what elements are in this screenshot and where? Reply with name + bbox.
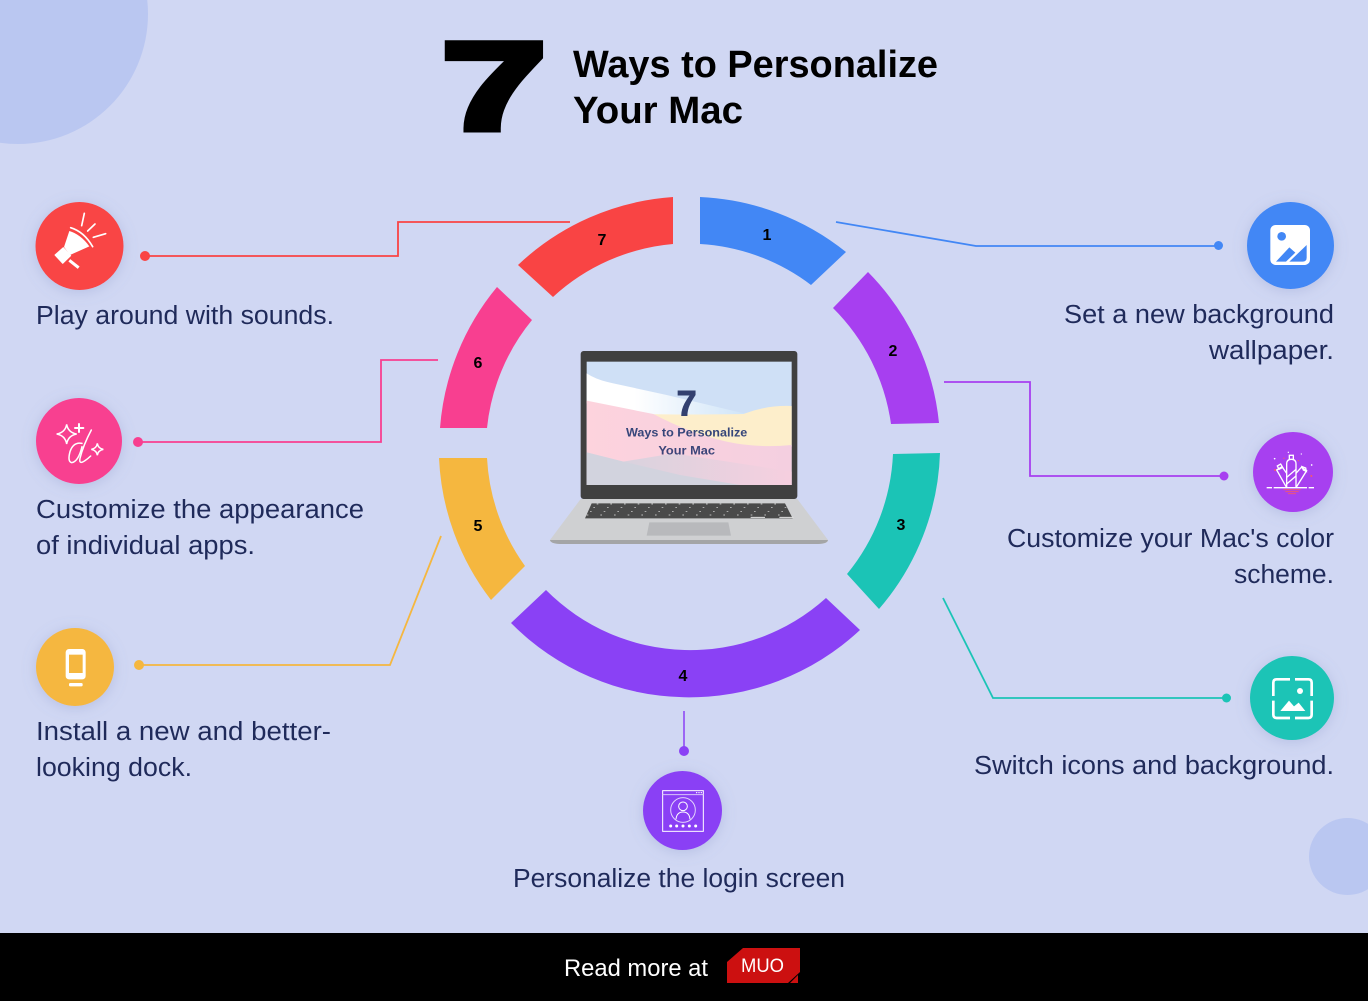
- ring segment 7: [518, 197, 673, 297]
- ring segment 6: [440, 287, 532, 428]
- title numeral 7: 7: [442, 18, 546, 156]
- text: color scheme: scheme.: [1234, 561, 1334, 589]
- title: [442, 18, 938, 156]
- title text: Your Mac: [573, 90, 743, 132]
- title text: Ways to Personalize: [573, 44, 938, 86]
- text: play around with sounds: Play around with sounds.: [36, 302, 334, 330]
- ring segment 5: [439, 458, 525, 600]
- ring segment 4: [511, 590, 860, 697]
- footer bar: [0, 933, 1368, 1001]
- text: customize the appearance: Customize the appearance: [36, 496, 364, 524]
- ring segment 4: 4: [679, 668, 688, 685]
- laptop base: [550, 499, 828, 544]
- screen text: Your Mac: [658, 444, 715, 458]
- text: switch icons: Switch icons and background.: [974, 752, 1334, 780]
- keyboard: [585, 503, 793, 518]
- ring segment 5: 5: [474, 518, 483, 535]
- decorative circle: top left: [0, 0, 148, 144]
- text: install dock: looking dock.: [36, 754, 192, 782]
- text: background wallpaper: Set a new background: [1064, 301, 1334, 329]
- text: customize the appearance: of individual apps.: [36, 532, 255, 560]
- icon: script letter with sparkles: [36, 398, 122, 484]
- laptop illustration: [550, 351, 828, 544]
- ring segment 6: 6: [474, 355, 483, 372]
- ring segment 3: [847, 453, 940, 609]
- screen bezel: [581, 351, 797, 499]
- leader line 7: [140, 222, 570, 261]
- MUO logo: [727, 948, 800, 983]
- screen wallpaper: [587, 362, 792, 485]
- text: background wallpaper: [1064, 301, 1334, 365]
- screen text: 7: [677, 385, 697, 424]
- MUO logo: MUO: [741, 956, 784, 977]
- icon: framed image: [1250, 656, 1334, 740]
- ring segment 1: [700, 197, 846, 285]
- icon: spray cans: [1253, 432, 1333, 512]
- icon: login window: [643, 771, 722, 850]
- leader line 5: [134, 536, 441, 670]
- ring diagram: [439, 197, 940, 697]
- ring segment 1: 1: [763, 227, 772, 244]
- text: install dock: [36, 718, 331, 782]
- title text: [573, 44, 938, 132]
- text: customize the appearance: [36, 496, 364, 560]
- leader line 2: [944, 382, 1228, 480]
- text: background wallpaper: wallpaper.: [1208, 337, 1334, 365]
- ring segment 3: 3: [897, 517, 906, 534]
- text: color scheme: Customize your Mac's color: [1007, 525, 1335, 553]
- icon: megaphone: [36, 202, 124, 290]
- screen text: [626, 385, 747, 458]
- icon: phone dock: [36, 628, 114, 706]
- text: install dock: Install a new and better-: [36, 718, 331, 746]
- leader line 1: [836, 222, 1223, 250]
- trackpad: [647, 522, 731, 536]
- footer text: Read more at: [564, 955, 708, 982]
- decorative circle: bottom right: [1309, 818, 1368, 895]
- text: personalize login: Personalize the login screen: [513, 865, 845, 893]
- ring segment 2: [833, 272, 939, 424]
- leader line 6: [133, 360, 438, 447]
- text: color scheme: [1007, 525, 1335, 589]
- ring segment 2: 2: [889, 343, 898, 360]
- screen text: Ways to Personalize: [626, 426, 747, 440]
- icon: picture: [1247, 202, 1334, 289]
- ring segment 7: 7: [598, 232, 607, 249]
- leader line 3: [943, 598, 1231, 702]
- leader line 4: [679, 711, 689, 756]
